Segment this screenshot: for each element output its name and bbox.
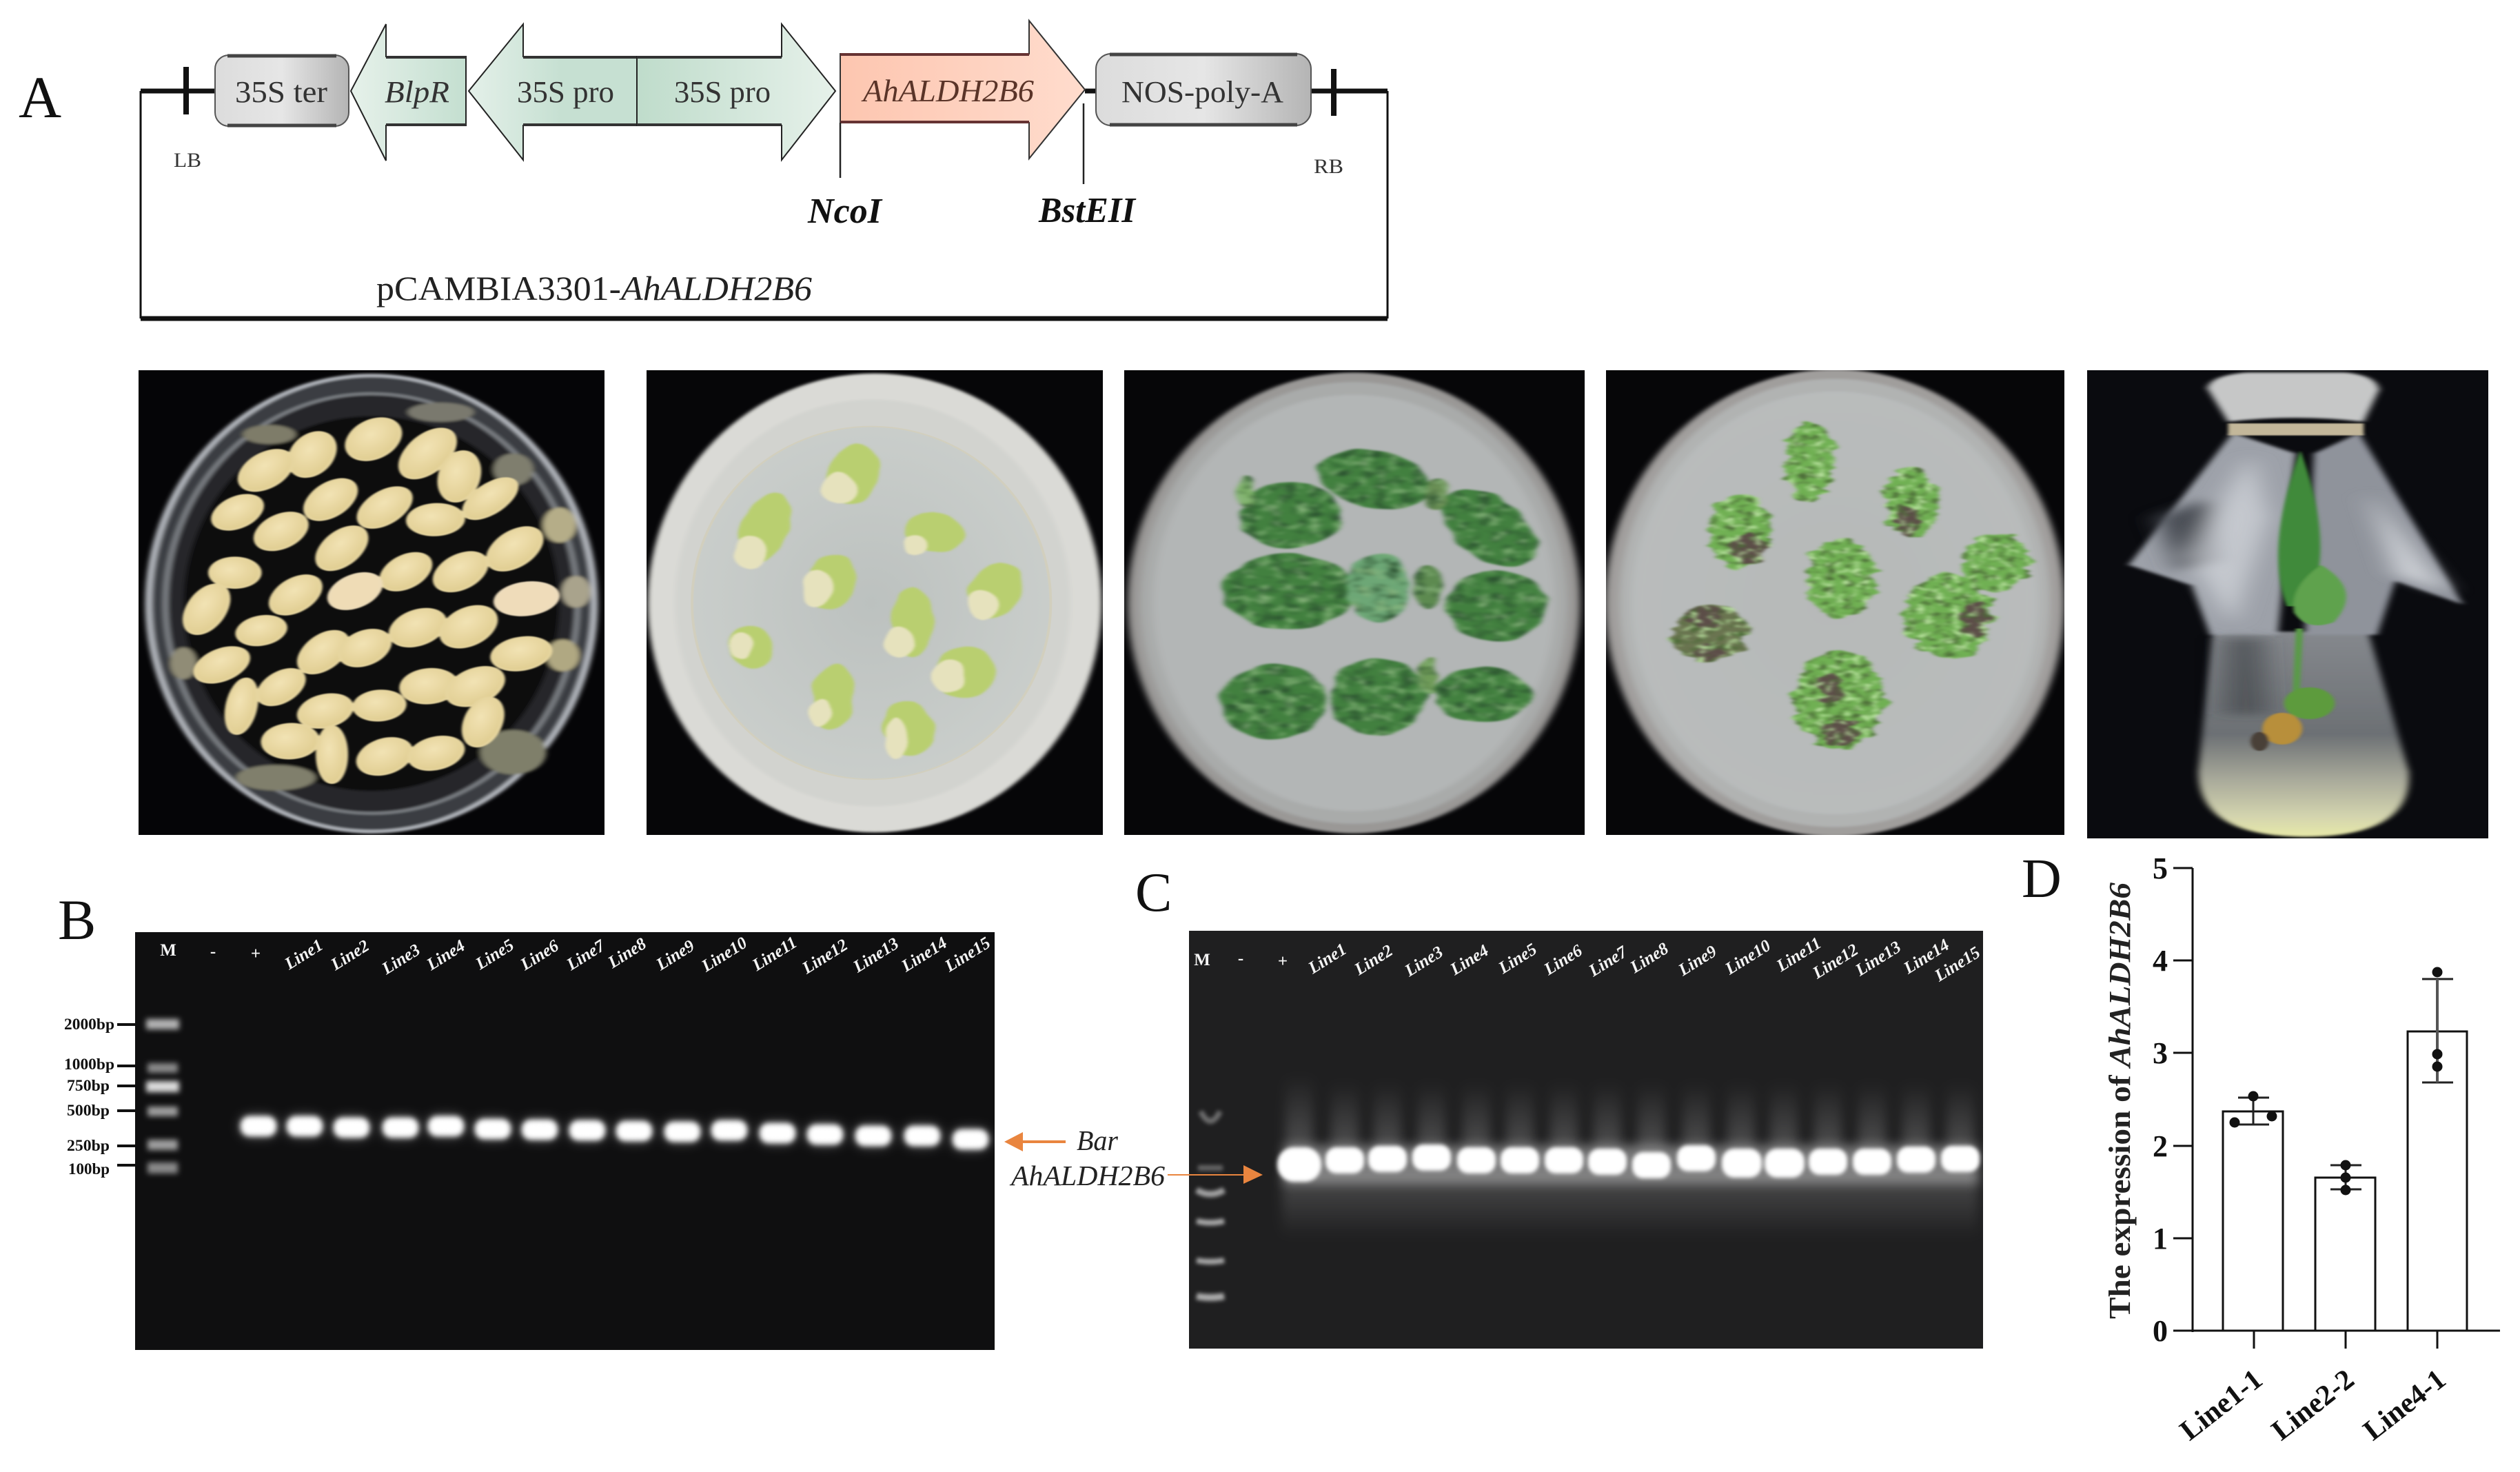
- lane labels C: Line10: [1721, 936, 1774, 979]
- NOS-poly-A box: [1096, 54, 1311, 125]
- panel C: gel electrophoresis AhALDH2B6: [1168, 931, 1984, 1349]
- lane labels C: Line5: [1495, 940, 1541, 978]
- ladder B: [146, 1019, 179, 1173]
- photo 5: plantlet in flask with bag: [2087, 370, 2488, 838]
- panel label A: A: [19, 64, 61, 130]
- lane labels B: Line13: [849, 934, 902, 977]
- y axis numbers: 4: [2153, 944, 2168, 978]
- 35S terminator box: [215, 55, 349, 126]
- panel label D: D: [2022, 849, 2062, 909]
- 35S promoter reverse arrow: 35S pro: [517, 75, 614, 109]
- size markers B: [64, 1016, 135, 1178]
- lane labels C: Line1: [1305, 940, 1350, 978]
- lane labels C: M: [1194, 951, 1210, 969]
- lane labels C: Line13: [1851, 938, 1904, 980]
- y axis numbers: 5: [2153, 851, 2168, 885]
- lane labels B: [160, 933, 994, 978]
- size markers B: 1000bp: [64, 1056, 114, 1073]
- arrow: AhALDH2B6: [1168, 1165, 1263, 1184]
- lane labels B: +: [251, 945, 261, 963]
- lane labels B: Line15: [941, 934, 994, 976]
- 35S promoter forward arrow: 35S pro: [674, 75, 771, 109]
- x axis labels: Line4-1: [2357, 1364, 2452, 1447]
- panel D: bar chart of AhALDH2B6 expression: [2103, 851, 2500, 1447]
- size markers B: 500bp: [67, 1102, 110, 1119]
- y axis numbers: 2: [2153, 1129, 2168, 1163]
- lane smear C: [1282, 1076, 1978, 1238]
- lane labels B: Line2: [327, 936, 373, 974]
- 35S promoter reverse arrow: [469, 24, 637, 160]
- size markers B: 100bp: [68, 1160, 110, 1178]
- y axis numbers: 0: [2153, 1314, 2168, 1348]
- lane labels B: Line1: [281, 936, 327, 974]
- lane labels C: Line12: [1809, 940, 1862, 983]
- axes: [2173, 868, 2500, 1349]
- data points: [2229, 967, 2443, 1196]
- lane labels B: Line3: [378, 940, 424, 978]
- error bar stem Line4-1: [2436, 979, 2439, 1082]
- lane labels B: Line9: [653, 936, 698, 974]
- vector backbone line: [141, 91, 1388, 319]
- lane labels B: Line4: [423, 936, 469, 974]
- lane labels C: Line11: [1773, 934, 1825, 976]
- photo 4: regenerating shoots on agar: [1606, 370, 2064, 835]
- lane labels C: Line4: [1447, 941, 1492, 979]
- BlpR arrow: [351, 24, 466, 161]
- lane labels B: Line5: [472, 936, 518, 974]
- photo 1: soybean seeds in dish: [139, 370, 604, 835]
- lane labels B: Line8: [604, 934, 650, 972]
- BlpR arrow: BlpR: [385, 75, 449, 109]
- lane labels B: Line6: [517, 936, 562, 974]
- LB label: LB: [174, 149, 201, 172]
- photo 2: cotyledon explants on agar: [647, 370, 1103, 835]
- AhALDH2B6 label: AhALDH2B6: [1009, 1160, 1166, 1191]
- bands C: [1277, 1145, 1980, 1182]
- lane labels B: -: [210, 942, 216, 961]
- error bars: [2238, 979, 2453, 1189]
- AhALDH2B6 arrow: AhALDH2B6: [861, 73, 1034, 108]
- lane labels B: M: [160, 941, 176, 960]
- NcoI site: NcoI: [807, 192, 883, 231]
- lane labels B: Line11: [749, 933, 800, 975]
- BstEII site: BstEII: [1038, 191, 1137, 230]
- panel label C: C: [1135, 863, 1172, 923]
- NOS-poly-A box: NOS-poly-A: [1121, 75, 1283, 109]
- RB label: RB: [1314, 155, 1343, 178]
- photo 3: green callus explants in dish: [1124, 370, 1585, 835]
- x axis labels: [2174, 1364, 2452, 1447]
- size markers B: 2000bp: [64, 1016, 114, 1033]
- ladder C: [1197, 1111, 1224, 1298]
- size markers B: 250bp: [67, 1137, 110, 1154]
- lane labels C: Line3: [1401, 942, 1447, 980]
- size markers B: 750bp: [67, 1077, 110, 1094]
- lane labels C: Line15: [1931, 943, 1984, 986]
- lane labels B: Line12: [798, 936, 851, 978]
- 35S terminator box: 35S ter: [235, 75, 327, 109]
- bands B: [241, 1116, 988, 1149]
- lane labels C: [1194, 934, 1984, 986]
- x axis labels: Line2-2: [2266, 1364, 2360, 1447]
- lane labels C: Line8: [1627, 939, 1672, 977]
- RB border marker: [1331, 69, 1337, 116]
- bars: [2223, 1031, 2467, 1331]
- y axis numbers: 3: [2153, 1036, 2168, 1070]
- lane labels B: Line7: [563, 936, 609, 974]
- y axis numbers: [2153, 851, 2168, 1348]
- lane labels C: +: [1278, 952, 1288, 971]
- lane labels C: Line2: [1351, 941, 1396, 979]
- AhALDH2B6 arrow: [840, 21, 1085, 159]
- panel B: gel electrophoresis Bar: [135, 932, 995, 1350]
- 35S promoter forward arrow: [637, 24, 835, 160]
- y axis numbers: 1: [2153, 1222, 2168, 1256]
- lane labels C: -: [1238, 949, 1243, 968]
- lane labels C: Line9: [1675, 942, 1720, 980]
- panel label B: B: [58, 888, 96, 951]
- Bar label: Bar: [1077, 1125, 1119, 1156]
- x axis labels: Line1-1: [2174, 1364, 2268, 1447]
- band glow C: [1283, 1146, 1978, 1183]
- lane labels B: Line14: [897, 934, 951, 976]
- vector name: pCAMBIA3301- AhALDH2B6: [376, 269, 812, 307]
- panel A: vector construct map: [141, 21, 1388, 319]
- LB border marker: [183, 67, 189, 114]
- lane labels B: Line10: [698, 934, 751, 976]
- lane labels C: Line7: [1585, 942, 1632, 980]
- y axis title: The expression of AhALDH2B6: [2103, 883, 2137, 1319]
- arrow: Bar: [1004, 1132, 1066, 1151]
- lane labels C: Line6: [1541, 941, 1586, 979]
- lane labels C: Line14: [1900, 936, 1953, 978]
